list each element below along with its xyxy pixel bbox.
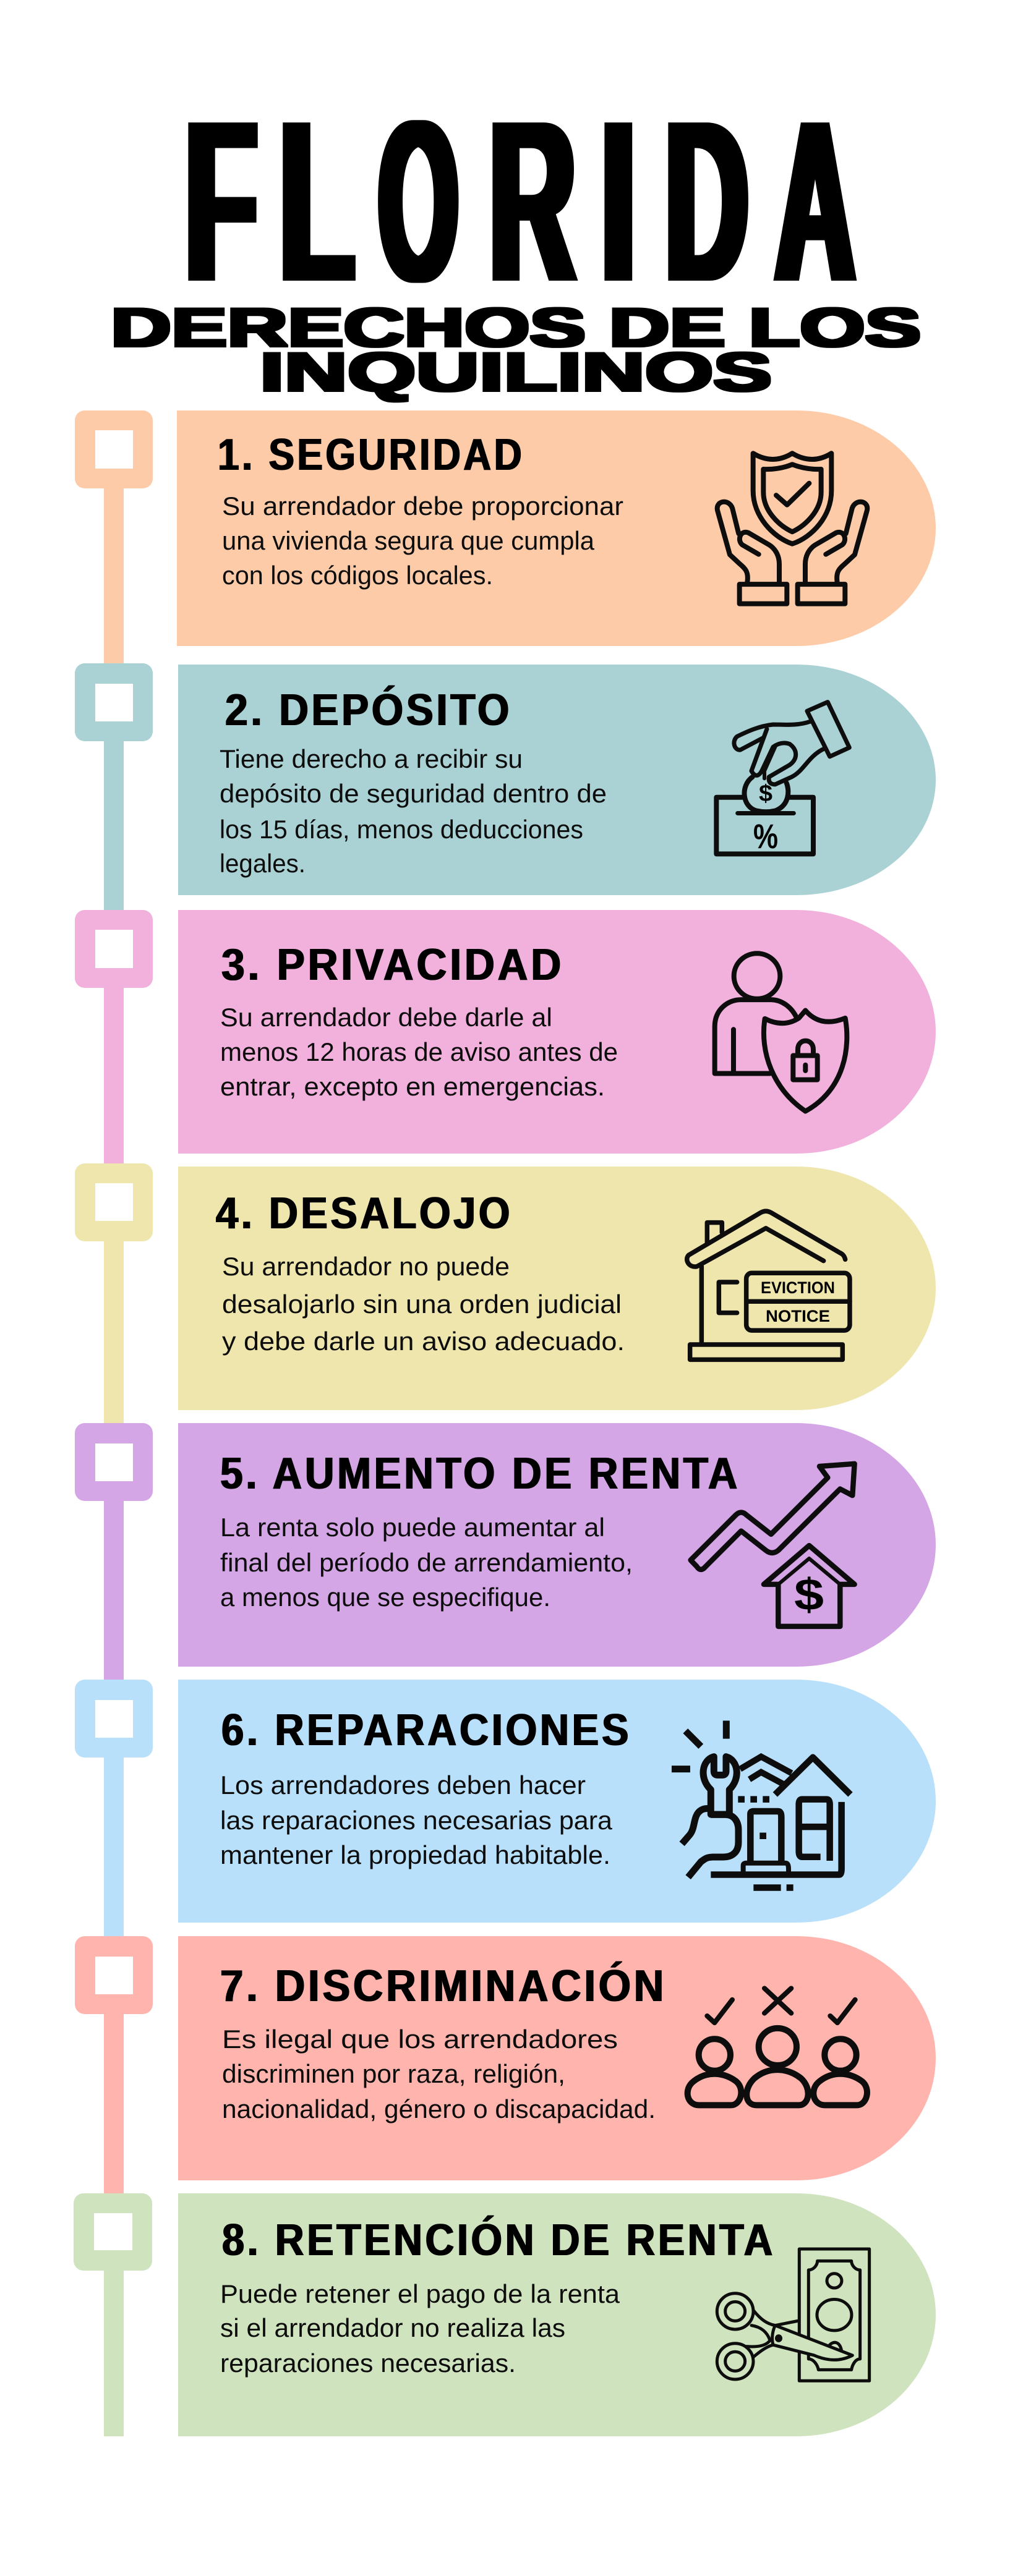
description 8 — [220, 2279, 620, 2378]
description 3: menos 12 horas de aviso antes de — [220, 1037, 618, 1066]
timeline marker 7 — [75, 1936, 153, 2195]
heading 5: 5. AUMENTO DE RENTA — [220, 1449, 740, 1498]
icon: three people with marks — [688, 1988, 867, 2105]
card background 8 — [178, 2193, 936, 2436]
timeline marker 4 — [75, 1163, 153, 1425]
icon text: percent: % — [753, 817, 778, 856]
title: R — [490, 72, 575, 329]
timeline marker 2 — [75, 663, 153, 912]
icon: hands holding shield — [717, 453, 867, 604]
title: D — [665, 72, 748, 329]
heading 2: 2. DEPÓSITO — [225, 685, 512, 735]
icon: scissors cutting money — [717, 2249, 870, 2381]
heading 8: 8. RETENCIÓN DE RENTA — [222, 2215, 776, 2265]
timeline marker 3 — [75, 910, 153, 1165]
description 7: discriminen por raza, religión, — [222, 2059, 565, 2088]
panel: 8 retencion de renta — [74, 2193, 936, 2436]
heading 1: 1. SEGURIDAD — [218, 430, 524, 480]
description 3 — [220, 1003, 618, 1101]
description 8: si el arrendador no realiza las — [220, 2313, 565, 2342]
icon text: dollar: $ — [759, 781, 772, 807]
subtitle: DERECHOS DE LOS — [111, 297, 921, 358]
panel: 3 privacidad — [75, 910, 936, 1165]
icon text: eviction: EVICTION — [761, 1278, 835, 1297]
heading 4: 4. DESALOJO — [216, 1189, 513, 1238]
panel: 7 discriminacion — [75, 1936, 936, 2195]
description 5: a menos que se especifique. — [220, 1583, 550, 1612]
description 2: legales. — [220, 849, 306, 878]
description 3: entrar, excepto en emergencias. — [220, 1072, 605, 1101]
description 2 — [220, 744, 607, 878]
icon text: notice: NOTICE — [766, 1307, 830, 1325]
panel: 4 desalojo — [75, 1163, 936, 1425]
title: F — [186, 72, 257, 329]
icon text: dollar: $ — [794, 1570, 824, 1620]
description 6: las reparaciones necesarias para — [220, 1806, 613, 1835]
card background 2 — [178, 665, 936, 895]
card background 1 — [177, 410, 936, 646]
title: I — [601, 72, 636, 329]
heading 6: 6. REPARACIONES — [221, 1706, 631, 1755]
title — [186, 72, 855, 329]
description 7: nacionalidad, género o discapacidad. — [222, 2094, 656, 2123]
description 4: desalojarlo sin una orden judicial — [222, 1290, 622, 1319]
icon: house with eviction notice — [687, 1211, 850, 1359]
timeline marker 8 — [74, 2193, 152, 2436]
description 6: Los arrendadores deben hacer — [220, 1770, 586, 1800]
icon: person with lock shield — [715, 953, 847, 1112]
description 4: Su arrendador no puede — [222, 1252, 510, 1281]
subtitle: INQUILINOS — [260, 341, 772, 402]
description 6 — [220, 1770, 613, 1869]
description 4 — [222, 1252, 625, 1356]
icon: hand dropping coin in box — [716, 702, 849, 856]
description 8: reparaciones necesarias. — [220, 2349, 516, 2378]
title: L — [280, 72, 354, 329]
icon: wrench and house — [672, 1720, 850, 1887]
description 1: una vivienda segura que cumpla — [222, 526, 595, 555]
heading 7: 7. DISCRIMINACIÓN — [220, 1961, 667, 2011]
description 7: Es ilegal que los arrendadores — [222, 2025, 618, 2054]
timeline marker 5 — [75, 1423, 153, 1681]
description 4: y debe darle un aviso adecuado. — [222, 1327, 625, 1356]
subtitle — [111, 297, 921, 402]
description 5: final del período de arrendamiento, — [220, 1548, 633, 1577]
title: O — [379, 72, 458, 329]
panel: 6 reparaciones — [75, 1680, 936, 1938]
timeline marker 1 — [75, 410, 153, 665]
card background 4 — [178, 1167, 936, 1410]
description 2: Tiene derecho a recibir su — [220, 744, 523, 773]
description 1: Su arrendador debe proporcionar — [222, 491, 623, 521]
card background 3 — [178, 910, 936, 1154]
panel: 1 seguridad — [75, 410, 936, 665]
description 6: mantener la propiedad habitable. — [220, 1840, 610, 1869]
card background 6 — [178, 1680, 936, 1923]
card background 5 — [178, 1423, 936, 1667]
description 1: con los códigos locales. — [222, 561, 493, 590]
timeline marker 6 — [75, 1680, 153, 1938]
description 7 — [222, 2025, 656, 2123]
card background 7 — [178, 1936, 936, 2180]
description 3: Su arrendador debe darle al — [220, 1003, 552, 1032]
description 5 — [220, 1513, 633, 1612]
description 1 — [222, 491, 623, 590]
description 2: depósito de seguridad dentro de — [220, 779, 607, 808]
panel: 5 aumento de renta — [75, 1423, 936, 1681]
text: A — [776, 72, 855, 329]
panel: 2 deposito — [75, 663, 936, 912]
description 5: La renta solo puede aumentar al — [220, 1513, 605, 1542]
description 2: los 15 días, menos deducciones — [220, 815, 583, 844]
description 8: Puede retener el pago de la renta — [220, 2279, 620, 2308]
heading 3: 3. PRIVACIDAD — [221, 940, 564, 990]
icon: rising arrow and house — [691, 1464, 855, 1626]
